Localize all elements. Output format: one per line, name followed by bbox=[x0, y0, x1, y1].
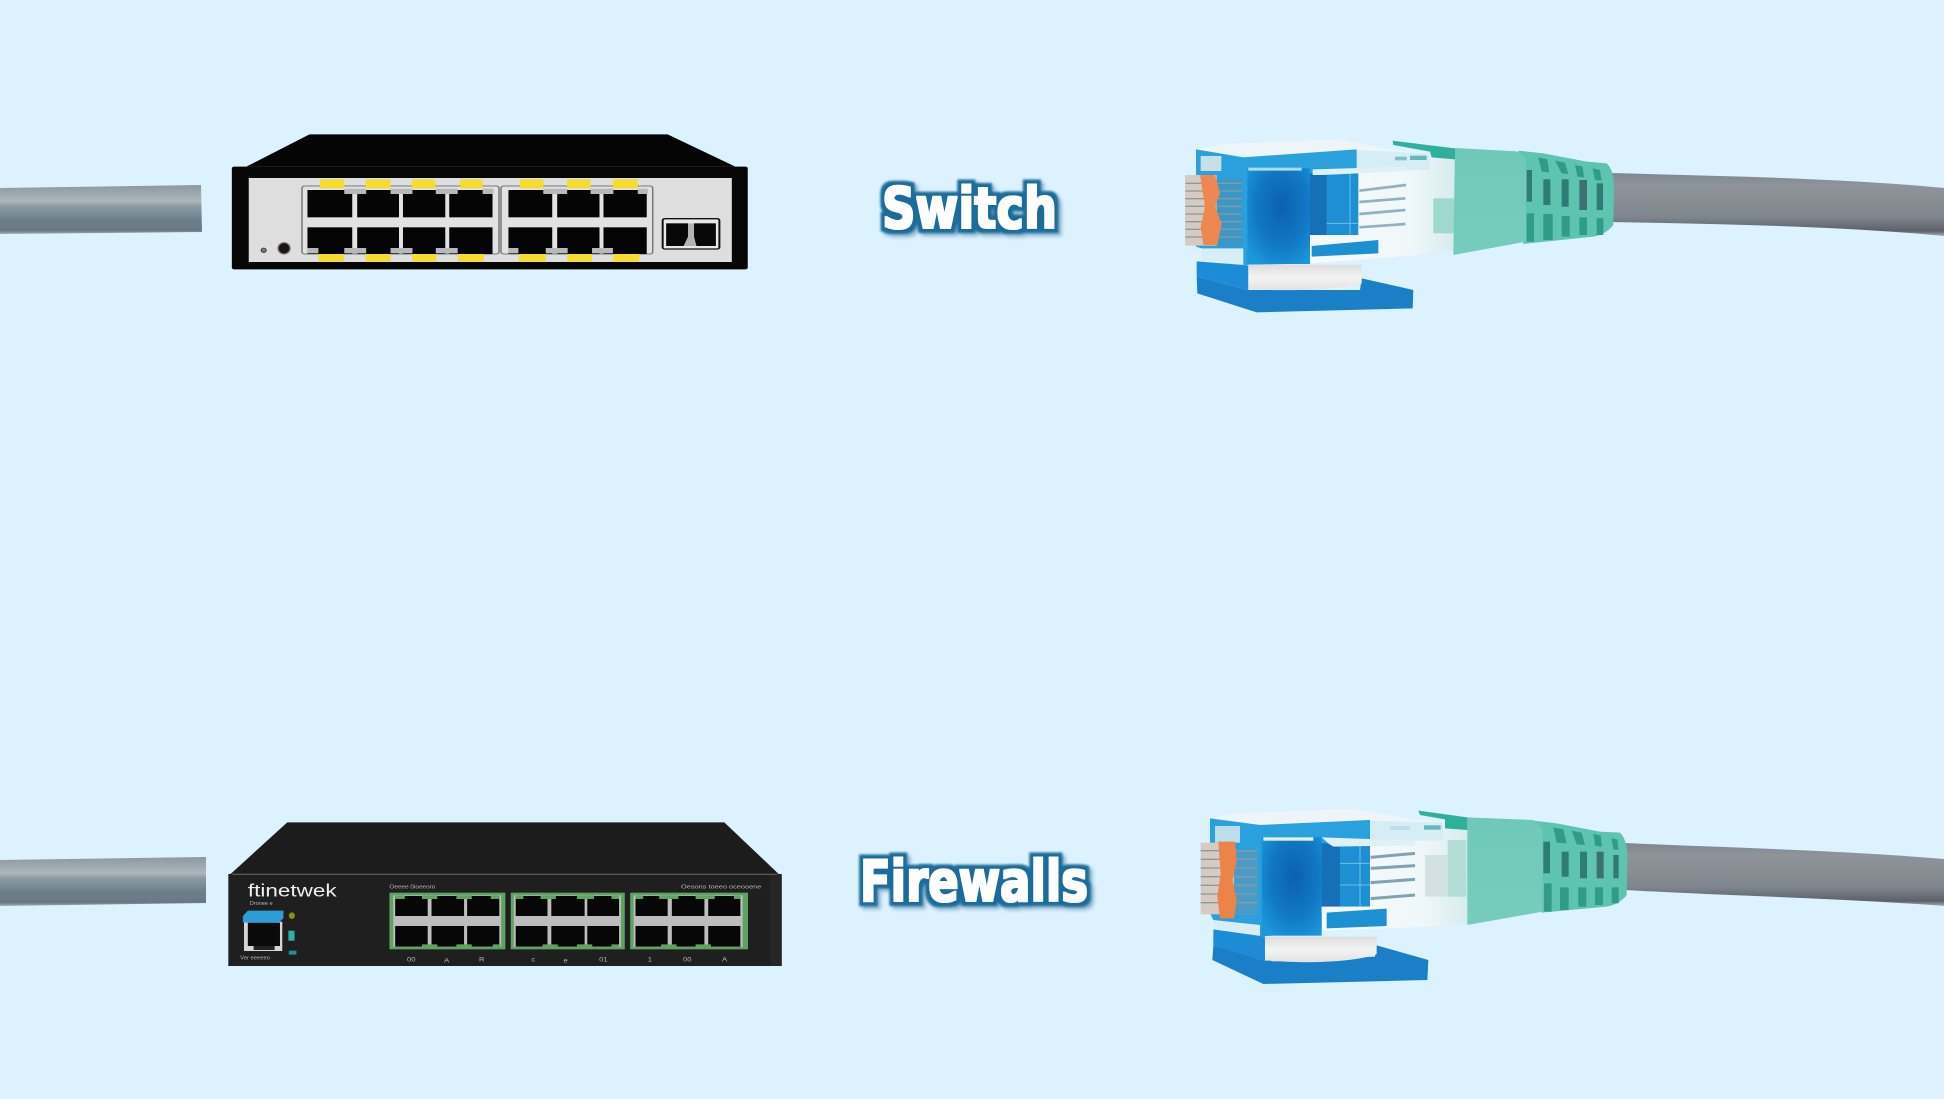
power socket bbox=[278, 243, 290, 254]
firewall port numbers: 00 bbox=[407, 956, 416, 964]
contact blades bbox=[1359, 185, 1406, 227]
blue latch bbox=[1197, 277, 1413, 312]
cable: bottom right bbox=[1625, 843, 1944, 906]
switch top cover bbox=[246, 134, 735, 167]
connector top face bbox=[1196, 139, 1430, 156]
blue latch upper bbox=[1197, 261, 1248, 290]
clear housing bbox=[1310, 149, 1455, 263]
lower clear bridge bbox=[1202, 248, 1243, 265]
corner highlight bbox=[1201, 156, 1221, 171]
clear housing tinted band bbox=[1357, 150, 1430, 170]
switch port group right bbox=[501, 186, 653, 254]
cable: top right bbox=[1610, 173, 1944, 236]
blue inner window bbox=[1322, 837, 1415, 907]
switch port group left bbox=[302, 186, 499, 254]
label: Firewalls: Firewalls bbox=[860, 849, 1088, 915]
firewall front body bbox=[228, 874, 782, 966]
boot top strip bbox=[1418, 811, 1467, 830]
firewall device bbox=[228, 822, 782, 966]
port caption left: Oeeee 0ioeeoro bbox=[389, 884, 436, 891]
connector: bottom bbox=[1201, 809, 1627, 984]
clear housing bbox=[1322, 820, 1467, 931]
clear window teal bbox=[1425, 840, 1466, 897]
label: Switch: Switch bbox=[882, 176, 1057, 242]
clear housing tinted band bbox=[1370, 821, 1443, 841]
firewall port group 2 bbox=[511, 893, 625, 949]
firewall side edge bbox=[770, 875, 782, 966]
firewall port numbers: A bbox=[444, 957, 449, 964]
firewall logo caption: Dronee e bbox=[250, 900, 273, 907]
blue latch upper bbox=[1213, 929, 1265, 961]
top edge line bbox=[232, 874, 777, 875]
blue inner cavity bbox=[1247, 168, 1310, 264]
lower blue strip bbox=[1312, 240, 1378, 257]
cable: bottom left bbox=[0, 857, 206, 906]
blue housing bbox=[1210, 818, 1370, 937]
corner highlight bbox=[1215, 826, 1240, 843]
connector top face bbox=[1210, 809, 1443, 825]
firewall management port bbox=[243, 911, 283, 951]
switch front panel bbox=[249, 178, 732, 262]
status led bbox=[261, 248, 266, 253]
firewall port numbers: 00 bbox=[683, 956, 691, 964]
firewall port group 1 bbox=[389, 893, 505, 949]
connector: top bbox=[1185, 139, 1614, 312]
white drum bbox=[1248, 265, 1362, 290]
clear window teal bbox=[1433, 198, 1454, 233]
switch front body bbox=[232, 167, 748, 269]
white drum bbox=[1265, 937, 1377, 962]
switch uplink port bbox=[663, 219, 719, 249]
firewall indicators bbox=[288, 912, 296, 955]
blue inner cavity bbox=[1262, 837, 1322, 936]
boot top strip bbox=[1393, 141, 1455, 159]
boot sleeve bbox=[1453, 148, 1526, 255]
blue latch bbox=[1212, 945, 1428, 984]
strain relief bbox=[1533, 821, 1627, 913]
yellow port markers top bbox=[320, 179, 638, 188]
pins bbox=[1201, 842, 1258, 918]
firewall port group 3 bbox=[630, 893, 748, 949]
firewall port numbers bbox=[407, 956, 727, 964]
firewall port numbers: 01 bbox=[599, 956, 608, 964]
lower clear bridge bbox=[1213, 920, 1260, 937]
firewall port numbers: c bbox=[531, 956, 536, 964]
firewall port numbers: R bbox=[479, 956, 485, 964]
strain relief bbox=[1518, 151, 1614, 244]
lower white band bbox=[1322, 907, 1387, 913]
pins bbox=[1185, 175, 1242, 247]
contact blades bbox=[1371, 853, 1415, 899]
firewall port caption: Ver eeeeeo bbox=[240, 955, 271, 962]
yellow port markers bottom bbox=[318, 254, 639, 262]
firewall logo: ftinetwek bbox=[248, 881, 337, 900]
boot sleeve bbox=[1467, 817, 1543, 925]
lower white band bbox=[1310, 235, 1378, 246]
cable: top left bbox=[0, 185, 202, 234]
lower blue strip bbox=[1327, 909, 1387, 928]
cavity top highlight bbox=[1248, 168, 1302, 171]
cavity top highlight bbox=[1263, 837, 1313, 841]
blue housing bbox=[1196, 149, 1357, 265]
firewall top cover bbox=[231, 822, 779, 874]
firewall port numbers: e bbox=[564, 957, 568, 964]
firewall port numbers: 1 bbox=[648, 956, 652, 964]
firewall port numbers: A bbox=[722, 956, 727, 964]
blue inner window bbox=[1310, 167, 1407, 235]
port caption right: Oesons toeeo oceooene bbox=[681, 884, 762, 891]
switch device bbox=[232, 134, 748, 269]
